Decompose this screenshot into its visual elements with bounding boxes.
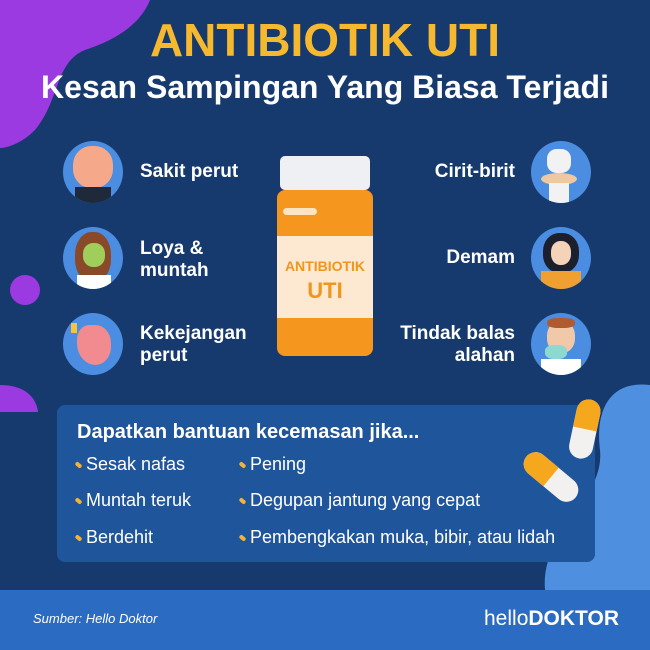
panel: seek help: Pening: [250, 454, 306, 474]
panel: seek help: Pembengkakan muka, bibir, atau lidah: [250, 527, 555, 547]
label: Demam: Demam: [446, 247, 515, 268]
label: Sakit perut: Sakit perut: [140, 161, 238, 182]
icon: nausea: [63, 227, 123, 289]
panel: seek help: Berdehit: [86, 527, 153, 547]
icon: capsules: [524, 399, 600, 502]
label: Kekejangan perut: [140, 323, 247, 366]
bullets: Sesak nafas: [86, 454, 185, 474]
icon: stomach pain: [63, 141, 123, 203]
label: Tindak balas alahan: alahan: [455, 345, 515, 366]
bottle label: UTI: [307, 278, 343, 303]
panel: seek help: Degupan jantung yang cepat: [250, 490, 480, 510]
label: Tindak balas alahan: [400, 323, 515, 366]
panel: seek help: [57, 405, 595, 562]
subtitle: Kesan Sampingan Yang Biasa Terjadi: [41, 69, 609, 105]
bottle label: [277, 236, 373, 318]
label: Loya & muntah: muntah: [140, 260, 209, 281]
source: Sumber: Hello Doktor: [33, 611, 157, 626]
icon: allergy: [531, 313, 591, 375]
bottle label: ANTIBIOTIK: [285, 258, 365, 274]
icon: stomach cramp: [63, 313, 123, 375]
bottle body: [277, 190, 373, 356]
label: Kekejangan perut: perut: [140, 345, 188, 366]
panel heading: Dapatkan bantuan kecemasan jika...: [77, 421, 419, 443]
icon: toilet: [531, 141, 591, 203]
logo: helloDOKTOR: [484, 607, 619, 630]
bottle: [277, 156, 373, 356]
icon: fever: [531, 227, 591, 289]
label: Loya & muntah: Loya &: [140, 238, 203, 259]
label: Tindak balas alahan: Tindak balas: [400, 323, 515, 344]
bottle cap: [280, 156, 370, 190]
label: Cirit-birit: Cirit-birit: [435, 161, 515, 182]
label: Loya & muntah: [140, 238, 209, 281]
label: Kekejangan perut: Kekejangan: [140, 323, 247, 344]
footer band: [0, 590, 650, 650]
panel: seek help: Muntah teruk: [86, 490, 191, 510]
title: ANTIBIOTIK UTI: [150, 14, 500, 66]
